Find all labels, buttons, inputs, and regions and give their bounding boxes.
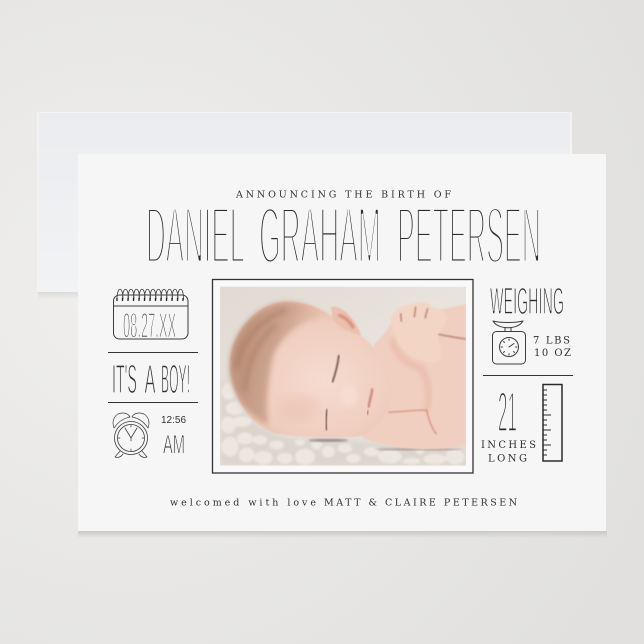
title: baby name: GRAHAM bbox=[259, 190, 381, 281]
envelope shadow bbox=[38, 292, 78, 299]
footer: welcome line: welcomed with love bbox=[170, 498, 316, 508]
divider bbox=[483, 374, 573, 376]
title: baby name: DANIEL bbox=[146, 190, 245, 281]
photo frame bbox=[212, 280, 473, 473]
footer: welcome line: MATT & CLAIRE PETERSEN bbox=[324, 498, 517, 508]
envelope bbox=[37, 112, 572, 292]
text: it's a boy: BOY! bbox=[161, 357, 190, 402]
card shadow bbox=[78, 531, 607, 538]
blanket texture bbox=[221, 384, 464, 465]
icon: calendar bbox=[114, 289, 188, 346]
panel: weight and length bbox=[481, 281, 573, 464]
text: weight bbox=[533, 336, 571, 359]
icon: alarm clock bbox=[113, 413, 149, 457]
panel: date, gender and time bbox=[108, 289, 198, 460]
text: time: 12:56 bbox=[161, 415, 186, 426]
hand bbox=[390, 302, 439, 352]
title: baby name: PETERSEN bbox=[397, 189, 541, 281]
baby body bbox=[362, 304, 466, 449]
eye lids bbox=[332, 355, 339, 382]
text: it's a boy: IT'S bbox=[112, 355, 137, 402]
title: baby name bbox=[146, 189, 541, 281]
ear bbox=[331, 307, 361, 335]
divider bbox=[108, 402, 198, 404]
text: it's a boy: A bbox=[144, 356, 156, 402]
footer: welcome line bbox=[170, 498, 517, 508]
baby head bbox=[230, 302, 392, 438]
text: inches long: LONG bbox=[488, 454, 527, 464]
text: weight: 10 OZ bbox=[534, 348, 571, 359]
divider bbox=[108, 352, 198, 354]
cheek flush bbox=[284, 398, 314, 418]
arm crease bbox=[388, 410, 437, 434]
text: weight: 7 LBS bbox=[533, 336, 570, 346]
heading: announcing line: ANNOUNCING THE BIRTH OF bbox=[235, 190, 451, 200]
hair bbox=[230, 302, 328, 425]
neck and arm shading bbox=[392, 338, 429, 410]
photo: sleeping newborn bbox=[220, 287, 466, 466]
card bbox=[78, 154, 606, 531]
text: inches long: INCHES bbox=[481, 440, 536, 451]
lower blanket bbox=[220, 398, 446, 466]
text: length: 21 bbox=[498, 380, 517, 443]
announcement scene bbox=[37, 112, 607, 537]
date text: 08.27.XX bbox=[123, 306, 176, 346]
icon: baby scale bbox=[492, 321, 526, 364]
icon: ruler bbox=[543, 384, 562, 461]
nose and lips bbox=[344, 390, 354, 404]
text: inches long bbox=[481, 440, 536, 464]
text: AM: AM bbox=[163, 430, 185, 460]
text: weighing: WEIGHING bbox=[490, 281, 564, 323]
text: it's a boy bbox=[112, 355, 190, 402]
